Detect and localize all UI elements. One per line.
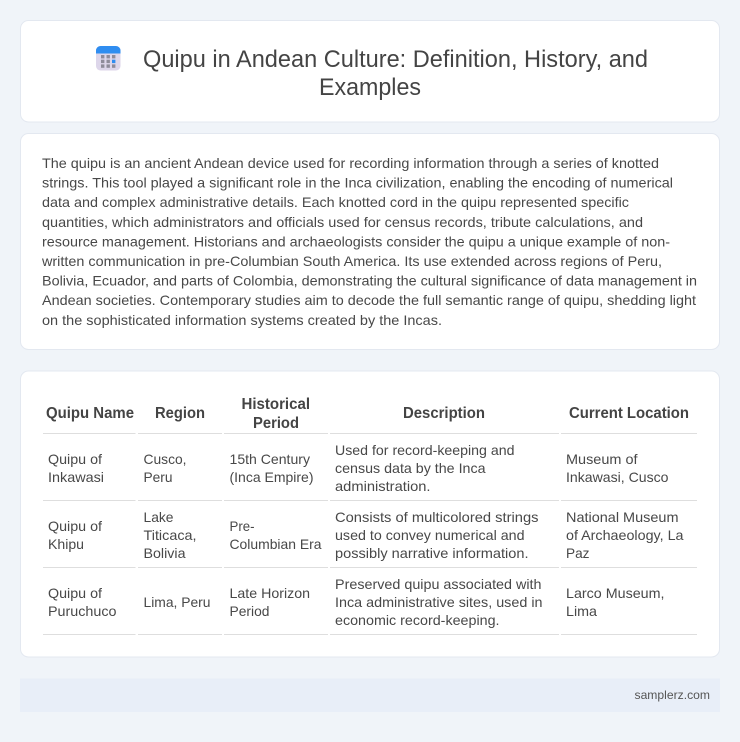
table row: Quipu of Inkawasi: 15th Century <box>230 451 310 467</box>
footer source text: samplerz.com <box>634 688 710 702</box>
table row: Quipu of Inkawasi: Peru <box>144 469 172 485</box>
table row: Quipu of Puruchuco: Lima <box>566 603 597 619</box>
text block: introduction: quantities, which administrators and officials used for census records, tribute calculations, and <box>42 214 643 230</box>
table row: Quipu of Khipu: Khipu <box>48 536 84 552</box>
table row: Quipu of Puruchuco <box>48 576 664 628</box>
footer bar <box>20 678 720 712</box>
title: Examples <box>319 74 421 101</box>
table header row: Quipu Name <box>46 405 134 422</box>
table header row <box>46 396 689 432</box>
text block: introduction: written communication in pre-Columbian South America. Its use extended across regions of Peru, <box>41 253 662 269</box>
table header row: Historical <box>242 396 310 413</box>
table row: Quipu of Puruchuco: Preserved quipu associated with <box>335 576 542 592</box>
table row: Quipu of Inkawasi: Inkawasi, Cusco <box>566 469 669 485</box>
table row: Quipu of Puruchuco: Inca administrative sites, used in <box>335 594 542 610</box>
table row: Quipu of Inkawasi <box>48 442 669 494</box>
table row: Quipu of Inkawasi: (Inca Empire) <box>230 469 314 485</box>
table row: Quipu of Puruchuco: Puruchuco <box>48 603 117 619</box>
table row: Quipu of Inkawasi: Used for record-keeping and <box>335 442 514 458</box>
table row: Quipu of Inkawasi: Quipu of <box>48 451 102 467</box>
panel: table card <box>20 371 720 657</box>
table row: Quipu of Khipu: Pre- <box>230 518 255 534</box>
table row: Quipu of Khipu: Quipu of <box>48 518 102 534</box>
table header row: Period <box>253 415 299 432</box>
table row: Quipu of Khipu: Consists of multicolored strings <box>335 509 538 525</box>
icon: calendar <box>96 46 120 70</box>
table row: Quipu of Khipu: Lake <box>144 509 174 525</box>
table row: Quipu of Inkawasi: Inkawasi <box>48 469 104 485</box>
panel: title card <box>20 20 720 122</box>
text block: introduction <box>41 155 697 328</box>
table row: Quipu of Puruchuco: economic record-keeping. <box>335 612 500 628</box>
table row: Quipu of Khipu: possibly narrative information. <box>335 545 528 561</box>
title <box>143 46 648 101</box>
text block: introduction: on the sophisticated information systems created by the Incas. <box>42 312 442 328</box>
table row: Quipu of Khipu <box>48 509 684 561</box>
table row: Quipu of Khipu: Columbian Era <box>230 536 322 552</box>
table row: Quipu of Inkawasi: Cusco, <box>144 451 186 467</box>
table row: Quipu of Khipu: Paz <box>566 545 590 561</box>
table row: Quipu of Khipu: Titicaca, <box>144 527 196 543</box>
panel: description paragraph <box>20 134 720 350</box>
table row: Quipu of Khipu: of Archaeology, La <box>566 527 684 543</box>
table row: Quipu of Khipu: Bolivia <box>144 545 186 561</box>
table row: Quipu of Khipu: used to convey numerical and <box>335 527 524 543</box>
text block: introduction: resource management. Historians and archaeologists consider the quipu a unique example of non- <box>42 233 670 249</box>
table row: Quipu of Inkawasi: administration. <box>335 478 430 494</box>
text block: introduction: data and complex administrative details. Each knotted cord in the quipu represented specific <box>42 194 629 210</box>
table header row: Region <box>155 405 205 422</box>
table header row: Description <box>403 405 485 422</box>
table row: Quipu of Puruchuco: Lima, Peru <box>144 594 210 610</box>
table row: Quipu of Inkawasi: Museum of <box>566 451 638 467</box>
table row: Quipu of Inkawasi: census data by the Inca <box>335 460 486 476</box>
table row: Quipu of Puruchuco: Period <box>230 603 270 619</box>
table header row: Current Location <box>569 405 689 422</box>
table row: Quipu of Puruchuco: Quipu of <box>48 585 102 601</box>
table row: Quipu of Khipu: National Museum <box>566 509 678 525</box>
text block: introduction: The quipu is an ancient Andean device used for recording information through a series of knotted <box>42 155 659 171</box>
text block: introduction: strings. This tool played a significant role in the Inca civilization, enabling the encoding of numerical <box>42 175 673 191</box>
table row: Quipu of Puruchuco: Larco Museum, <box>566 585 664 601</box>
text block: introduction: Andean societies. Contemporary studies aim to decode the full semantic range of quipu, shedding light <box>42 292 696 308</box>
title: Quipu in Andean Culture: Definition, History, and <box>143 46 648 73</box>
table row: Quipu of Puruchuco: Late Horizon <box>230 585 310 601</box>
text block: introduction: Bolivia, Ecuador, and parts of Colombia, demonstrating the cultural significance of data management in <box>42 273 697 289</box>
